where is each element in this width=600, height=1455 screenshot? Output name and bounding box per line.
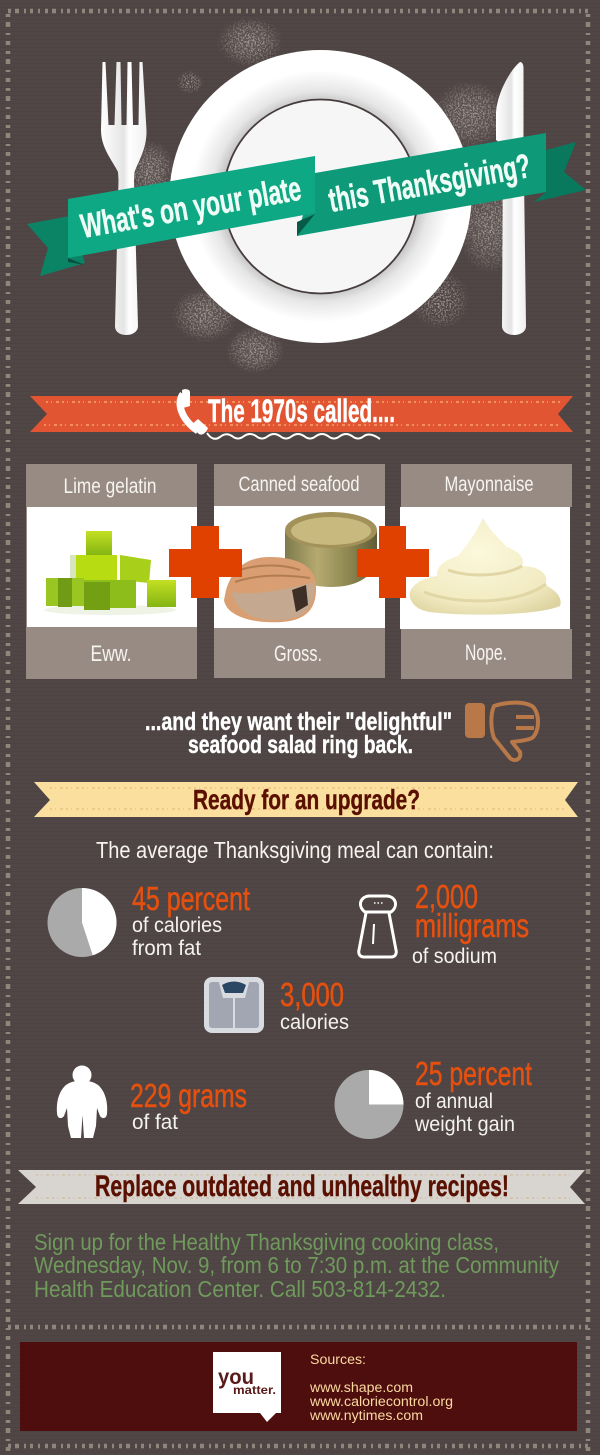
sources list: www.caloriecontrol.org <box>309 1394 453 1409</box>
card: mayonnaise: Mayonnaise <box>444 473 534 496</box>
banner: ready for an upgrade: Ready for an upgrade? <box>193 784 420 815</box>
logo: you matter: you <box>218 1366 254 1389</box>
stat: 3,000 calories: calories <box>280 1011 349 1034</box>
card: mayonnaise <box>400 464 572 679</box>
pie chart: 45 percent <box>48 888 117 957</box>
logo: you matter: matter. <box>233 1383 276 1397</box>
banner: ready for an upgrade <box>34 782 578 817</box>
image: canned fish <box>224 557 316 622</box>
title ribbon <box>27 133 586 276</box>
card: lime gelatin <box>26 464 197 679</box>
soft flour haze <box>126 20 520 372</box>
icon: telephone <box>180 389 208 435</box>
stat: 229 grams: 229 grams <box>130 1077 247 1114</box>
stat: 2,000 milligrams: milligrams <box>415 907 529 944</box>
icon: bathroom scale <box>204 977 264 1033</box>
left ribbon segment: What's on your plate <box>78 170 304 246</box>
sources list: www.shape.com <box>309 1380 413 1395</box>
icon: thumbs down <box>465 703 538 760</box>
icon: plate <box>170 50 472 343</box>
icon: salt shaker <box>359 896 396 957</box>
icon: plus sign <box>169 526 242 598</box>
stat: 45 percent: 45 percent <box>132 880 250 917</box>
left ribbon tail <box>27 216 85 276</box>
stat: 25 percent: 25 percent <box>415 1055 532 1092</box>
pie chart: 25 percent <box>334 1070 404 1139</box>
stat: 25 percent: of annual <box>415 1090 493 1113</box>
text: seafood salad ring <box>145 708 452 759</box>
stat: 45 percent: of calories <box>132 914 222 937</box>
text: cooking class sign-up: Sign up for the Healthy Thanksgiving cooking class, <box>34 1229 499 1255</box>
banner: the 1970s called: The 1970s called.... <box>208 393 395 429</box>
card: mayonnaise: Nope. <box>465 640 507 665</box>
sources list: www.nytimes.com <box>309 1408 423 1423</box>
text: seafood salad ring: seafood salad ring back. <box>188 731 413 759</box>
stat: 25 percent <box>334 1055 532 1139</box>
icon: plus sign <box>357 526 429 598</box>
stat: 229 grams: of fat <box>132 1111 178 1134</box>
stat: 25 percent: weight gain <box>414 1113 515 1136</box>
image: can <box>285 512 377 587</box>
stat: 45 percent <box>48 880 250 960</box>
text: intro line: The average Thanksgiving meal can contain: <box>96 837 494 863</box>
flour speckles <box>124 16 524 374</box>
banner: the 1970s called <box>30 389 573 439</box>
image: lime gelatin cubes <box>44 531 176 615</box>
stat: 2,000 milligrams: 2,000 <box>415 878 478 915</box>
card: lime gelatin: Lime gelatin <box>64 475 156 498</box>
stat: 2,000 milligrams: of sodium <box>412 945 497 968</box>
card: canned seafood: Gross. <box>274 641 322 666</box>
stat: 2,000 milligrams <box>359 878 529 968</box>
card: lime gelatin: Eww. <box>90 641 132 666</box>
sources list: Sources: <box>310 1352 366 1367</box>
stat: 229 grams <box>57 1066 247 1138</box>
telephone cord <box>207 433 380 439</box>
image: mayonnaise swirl <box>410 518 561 615</box>
stat: 45 percent: from fat <box>132 937 201 960</box>
icon: knife <box>496 62 526 335</box>
footer panel <box>20 1342 577 1431</box>
left ribbon segment <box>68 156 315 258</box>
card: canned seafood: Canned seafood <box>238 473 360 496</box>
stat: 3,000 calories <box>204 976 349 1034</box>
card: canned seafood <box>214 464 385 678</box>
logo: you matter <box>213 1352 281 1422</box>
sources list <box>309 1352 453 1423</box>
text: cooking class sign-up <box>34 1229 559 1302</box>
stat: 3,000 calories: 3,000 <box>280 976 344 1013</box>
text: cooking class sign-up: Health Education Center. Call 503-814-2432. <box>34 1276 446 1302</box>
icon: fork <box>101 62 147 335</box>
text: seafood salad ring: ...and they want their "delightful" <box>145 708 452 736</box>
icon: overweight person <box>57 1066 107 1138</box>
